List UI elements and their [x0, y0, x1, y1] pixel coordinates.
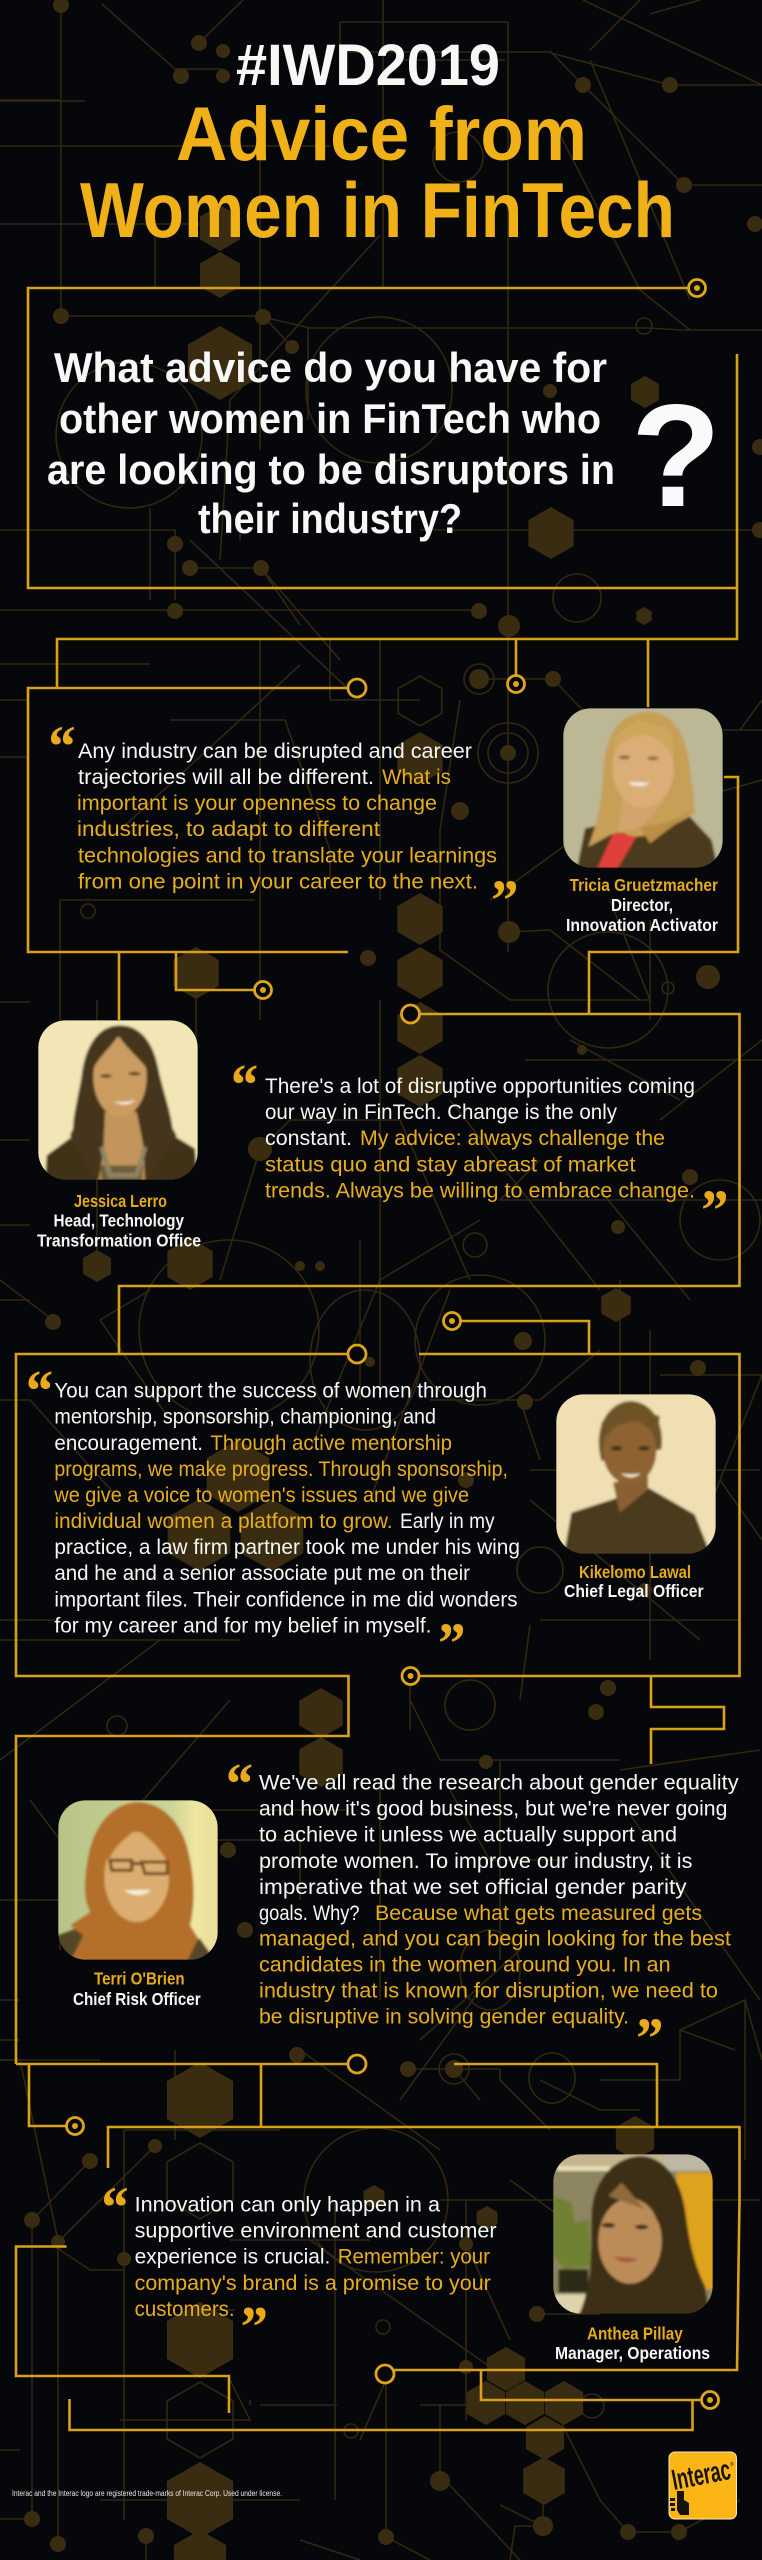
- quote text: candidates in the women around you. In an: [259, 1954, 671, 1976]
- closing quote mark: ”: [238, 2295, 266, 2360]
- name and title: Terri O'Brien: [94, 1968, 185, 1988]
- quote text: from one point in your career to the next.: [78, 870, 478, 894]
- quote text: goals. Why?: [259, 1902, 360, 1925]
- closing quote mark: ”: [488, 868, 517, 933]
- quote text: managed, and you can begin looking for the best: [259, 1928, 731, 1950]
- frame and connectors: [16, 2055, 657, 2134]
- panel: question: [28, 280, 737, 688]
- quote text: be disruptive in solving gender equality.: [259, 2006, 629, 2029]
- title: Advice from: [176, 92, 587, 177]
- name and title: Tricia Gruetzmacher: [570, 875, 718, 895]
- quote text: Because what gets measured gets: [375, 1902, 702, 1925]
- quote text: promote women. To improve our industry, it is: [259, 1850, 692, 1873]
- name and title: Head, Technology: [54, 1210, 184, 1230]
- name and title: Transformation Office: [37, 1230, 201, 1250]
- quote text: experience is crucial.: [135, 2246, 330, 2269]
- quote text: important files. Their confidence in me did wonders: [54, 1588, 518, 1612]
- title: Women in FinTech: [80, 166, 675, 254]
- quote text: we give a voice to women's issues and we give: [53, 1484, 469, 1507]
- quote text: practice, a law firm partner took me under his wing: [54, 1536, 520, 1559]
- quote text: Early in my: [400, 1510, 495, 1533]
- panel: Jessica Lerro quote: [30, 1005, 740, 1354]
- name and title: Director,: [611, 895, 673, 915]
- frame and connectors: [16, 1312, 740, 2064]
- question text: [47, 344, 615, 542]
- opening quote mark: “: [223, 1751, 252, 1816]
- closing quote mark: ”: [633, 2006, 662, 2071]
- quote text: My advice: always challenge the: [360, 1127, 665, 1150]
- quote text: [53, 1380, 520, 1638]
- name and title: [37, 1191, 201, 1250]
- photo: Kikelomo Lawal: [556, 1394, 716, 1554]
- name and title: Anthea Pillay: [587, 2324, 683, 2344]
- quote text: Innovation can only happen in a: [135, 2193, 440, 2216]
- quote text: Through active mentorship: [210, 1432, 452, 1455]
- quote text: Remember: your: [338, 2246, 490, 2269]
- quote text: There's a lot of disruptive opportunities coming: [265, 1075, 695, 1098]
- name and title: Chief Risk Officer: [73, 1989, 201, 2009]
- question text: What advice do you have for: [54, 344, 607, 391]
- quote text: [265, 1075, 695, 1202]
- closing quote mark: ”: [698, 1178, 727, 1243]
- name and title: Innovation Activator: [566, 915, 718, 935]
- quote text: and he and a senior associate put me on their: [54, 1562, 470, 1585]
- panel: Anthea Pillay quote: [16, 2127, 740, 2430]
- name and title: Chief Legal Officer: [564, 1581, 704, 1601]
- title: #IWD2019: [236, 33, 500, 98]
- icon: question mark: ?: [631, 374, 721, 537]
- panel: Tricia Gruetzmacher quote: [28, 640, 738, 1020]
- question text: are looking to be disruptors in: [47, 446, 615, 493]
- frame: [119, 1005, 740, 1354]
- opening quote mark: “: [46, 714, 74, 778]
- logo: Interac: ®: [730, 2461, 734, 2468]
- quote text: imperative that we set official gender parity: [259, 1876, 687, 1899]
- name and title: [566, 875, 718, 935]
- photo: Terri O'Brien: [58, 1800, 218, 1960]
- connectors and frame: [28, 640, 738, 1020]
- quote text: trajectories will all be different.: [78, 766, 374, 789]
- quote text: We've all read the research about gender equality: [259, 1772, 739, 1794]
- photo: Tricia Gruetzmacher: [563, 708, 723, 868]
- opening quote mark: “: [23, 1358, 52, 1423]
- quote text: programs, we make progress. Through sponsorship,: [54, 1458, 508, 1481]
- title: [80, 33, 675, 254]
- name and title: [564, 1562, 704, 1601]
- quote text: trends. Always be willing to embrace change.: [265, 1180, 695, 1202]
- name and title: Kikelomo Lawal: [579, 1562, 691, 1582]
- panel: Kikelomo Lawal quote: [16, 1312, 740, 2064]
- quote text: mentorship, sponsorship, championing, and: [54, 1406, 436, 1429]
- quote text: encouragement.: [54, 1432, 203, 1455]
- frame and connectors: [16, 2127, 740, 2430]
- quote text: [259, 1772, 739, 2029]
- quote text: Any industry can be disrupted and career: [78, 740, 472, 763]
- quote text: industries, to adapt to different: [77, 818, 380, 841]
- quote text: [135, 2193, 497, 2321]
- photo: Jessica Lerro: [38, 1020, 198, 1180]
- opening quote mark: “: [228, 1052, 257, 1117]
- question text: other women in FinTech who: [59, 395, 601, 442]
- name and title: Manager, Operations: [555, 2343, 710, 2363]
- quote text: What is: [382, 766, 451, 789]
- quote text: our way in FinTech. Change is the only: [265, 1101, 617, 1124]
- quote text: and how it's good business, but we're never going: [259, 1798, 727, 1820]
- question text: their industry?: [198, 495, 462, 542]
- quote text: technologies and to translate your learnings: [78, 844, 497, 868]
- quote text: supportive environment and customer: [135, 2220, 497, 2242]
- closing quote mark: ”: [435, 1611, 464, 1676]
- quote text: for my career and for my belief in myself.: [54, 1615, 432, 1638]
- name and title: [73, 1968, 201, 2009]
- logo: Interac: [669, 2452, 736, 2519]
- quote text: individual women a platform to grow.: [54, 1510, 393, 1533]
- question frame: [28, 280, 737, 688]
- quote text: to achieve it unless we actually support and: [259, 1824, 677, 1847]
- quote text: You can support the success of women through: [54, 1380, 487, 1402]
- name and title: [555, 2324, 710, 2363]
- opening quote mark: “: [98, 2174, 128, 2240]
- footer disclaimer: Interac and the Interac logo are registered trade-marks of Interac Corp. Used under license.: [12, 2489, 282, 2498]
- quote text: [77, 740, 497, 894]
- panel: Terri O'Brien quote: [16, 1751, 739, 2134]
- quote text: industry that is known for disruption, we need to: [259, 1980, 718, 2002]
- name and title: Jessica Lerro: [74, 1191, 167, 1211]
- photo: Anthea Pillay: [553, 2154, 713, 2314]
- quote text: constant.: [265, 1127, 352, 1150]
- quote text: status quo and stay abreast of market: [265, 1154, 636, 1176]
- quote text: important is your openness to change: [77, 792, 437, 815]
- quote text: company's brand is a promise to your: [135, 2272, 491, 2295]
- quote text: customers.: [135, 2298, 235, 2321]
